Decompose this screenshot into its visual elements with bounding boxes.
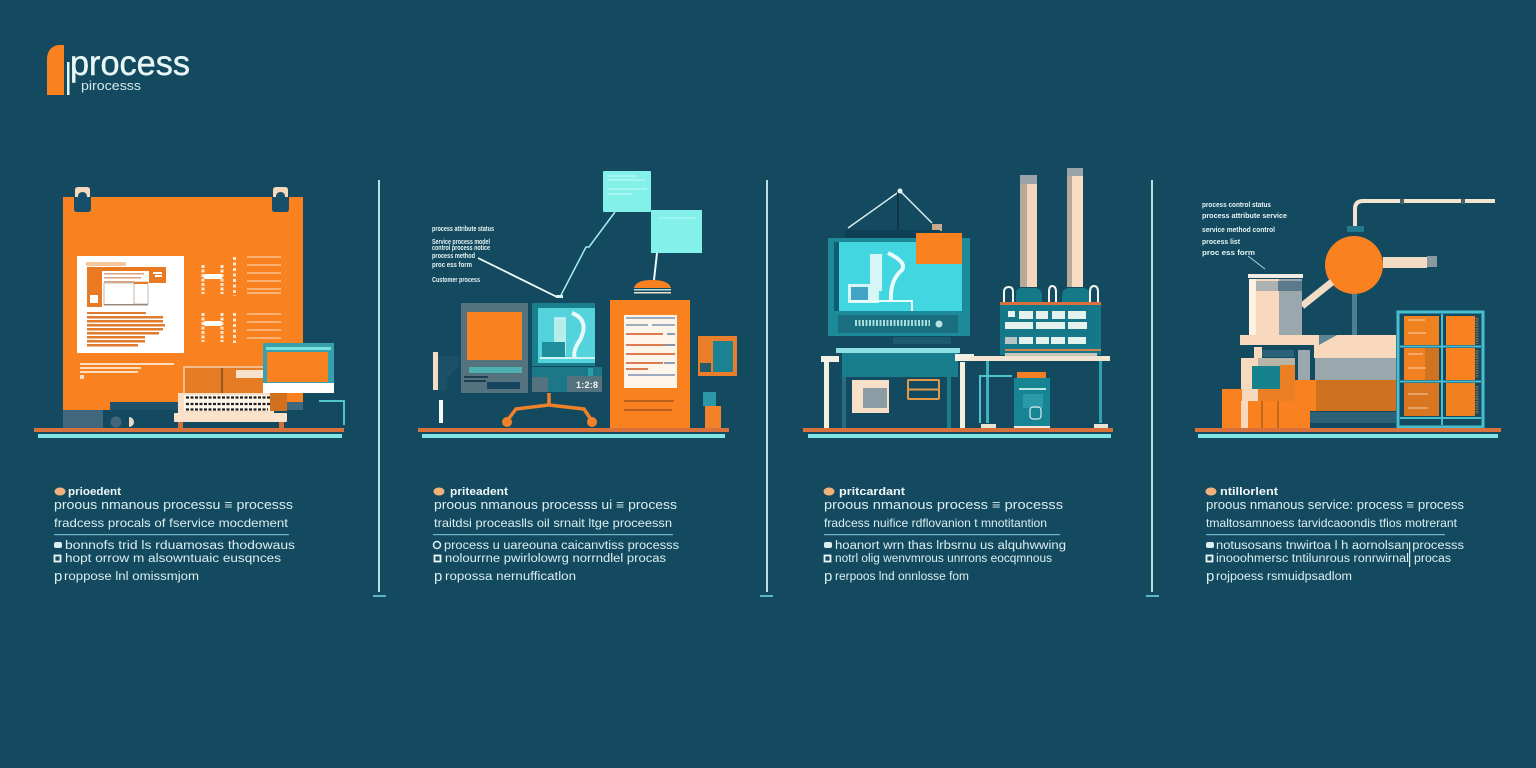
- connector lines: [478, 212, 657, 298]
- shelf: [1195, 428, 1501, 438]
- shelf: [418, 428, 729, 438]
- note boxes: [603, 171, 702, 253]
- text block 1: fradcess procals of fservice mocdement: [54, 516, 289, 530]
- cabinet unit: [1014, 372, 1050, 429]
- logo: [47, 44, 190, 95]
- annotation text: process method: [432, 253, 475, 260]
- desk computer: [174, 367, 287, 429]
- tank: [1248, 274, 1303, 343]
- illustration: monitor desk and chimneys: [803, 168, 1113, 438]
- connector glyphs and lines: [203, 257, 281, 343]
- divider 2: [760, 180, 773, 597]
- text block 1: proous nmanous processu ≡ processs: [54, 498, 293, 512]
- hanging wires: [845, 188, 942, 238]
- icon: bullet 2: [434, 488, 444, 496]
- shelf: [803, 428, 1113, 438]
- annotation text: control process notice: [432, 245, 490, 252]
- small box: [703, 392, 721, 430]
- logo: pirocesss: [81, 79, 141, 93]
- board hooks: [74, 187, 289, 212]
- text block 4: procas: [1414, 553, 1451, 565]
- illustration: orange board with computer: [34, 187, 344, 438]
- text block 1: roppose lnl omissmjom: [64, 571, 199, 583]
- laptop: [263, 343, 334, 393]
- text block 4: notusosans tnwirtoa l h aornolsan processs: [1216, 540, 1464, 552]
- chimneys: [1016, 168, 1090, 303]
- annotation text: process list: [1202, 239, 1241, 246]
- text block 3: p: [824, 568, 832, 585]
- heading: pritcardant: [839, 486, 905, 498]
- icon: bullet 1: [54, 488, 66, 496]
- annotation text: Customer process: [432, 277, 480, 284]
- text block 2: nolourrne pwirlolowrg norrndlel procas: [445, 553, 666, 565]
- illustration: workstation and cabinet: [418, 171, 737, 438]
- wall frame: [698, 336, 737, 376]
- text block 3: fradcess nuifice rdflovanion t mnotitantion: [824, 516, 1047, 530]
- base blocks: [63, 402, 303, 428]
- caption bars on board: [80, 363, 174, 379]
- annotation text: proc ess form: [1202, 250, 1255, 257]
- icon: bullet 3: [824, 488, 834, 496]
- desk: [821, 348, 974, 428]
- divider 3: [1146, 180, 1159, 597]
- annotation text: Service process model: [432, 239, 490, 246]
- text block 2: ropossa nernufficatlon: [445, 571, 576, 583]
- text block 4: tmaltosamnoess tarvidcaoondis tfios motrerant: [1206, 516, 1458, 530]
- annotation text: service method control: [1202, 227, 1275, 234]
- annotation text: process attribute status: [432, 226, 494, 233]
- board: [63, 197, 303, 410]
- monitor: [828, 233, 970, 344]
- top pipe: [1347, 199, 1495, 232]
- cable: [319, 401, 344, 425]
- text block 2: proous nmanous processs ui ≡ process: [434, 498, 677, 512]
- machine: [1000, 302, 1101, 356]
- text block 1: p: [54, 568, 62, 585]
- text block 2: traitdsi proceaslls oil srnait ltge proceessn: [434, 516, 672, 530]
- text block 4: proous nmanous service: process ≡ process: [1206, 498, 1464, 512]
- white document: [77, 256, 184, 353]
- table: [970, 356, 1110, 428]
- text block 3: hoanort wrn thas lrbsrnu us alquhwwing: [835, 540, 1066, 552]
- annotation text: proc ess form: [432, 262, 472, 269]
- text block 3: [824, 486, 1066, 585]
- orange sphere: [1325, 236, 1383, 294]
- text block 2: [433, 486, 679, 585]
- monitor left: [461, 303, 528, 393]
- annotation text: process attribute service: [1202, 213, 1287, 220]
- lamp bars: [433, 352, 459, 423]
- icon: bullet 4: [1206, 488, 1216, 496]
- text block 3: notrl olig wenvmrous unrrons eocqmnous: [835, 553, 1052, 565]
- text block 3: rerpoos lnd onnlosse fom: [835, 571, 969, 583]
- illustration: process plant and storage rack: [1195, 199, 1501, 438]
- text block 1: [54, 486, 295, 585]
- annotation text: [432, 226, 494, 284]
- shelf: [34, 428, 344, 438]
- storage rack: [1398, 312, 1483, 427]
- main machine: [1222, 335, 1396, 428]
- pipe loops: [1004, 286, 1098, 303]
- chair stand: [503, 393, 596, 426]
- logo: process: [70, 44, 190, 83]
- text block 4: p: [1206, 568, 1214, 585]
- dome lamp: [634, 280, 671, 294]
- text block 1: bonnofs trid ls rduamosas thodowaus: [65, 540, 295, 552]
- text block 4: [1206, 486, 1464, 585]
- text block 3: proous nmanous process ≡ processs: [824, 498, 1063, 512]
- text block 4: rojpoess rsmuidpsadlom: [1216, 571, 1352, 583]
- cabinet: [610, 300, 690, 430]
- text block 4: inooohmersc tntilunrous ronrwirnal: [1216, 553, 1409, 565]
- heading: prioedent: [68, 486, 121, 498]
- heading: ntillorlent: [1220, 486, 1278, 498]
- side pipe: [1383, 256, 1437, 268]
- monitor right: [532, 303, 602, 392]
- divider 1: [373, 180, 386, 597]
- text block 2: process u uareouna caicanvtiss processs: [444, 540, 679, 552]
- text block 2: p: [434, 568, 442, 585]
- text block 1: hopt orrow m alsowntuaic eusqnces: [65, 553, 281, 565]
- annotation text: [1202, 202, 1287, 257]
- heading: priteadent: [450, 486, 508, 498]
- monitor right: 1:2:8: [576, 380, 598, 390]
- annotation text: process control status: [1202, 202, 1271, 209]
- support pipes: [1302, 282, 1357, 336]
